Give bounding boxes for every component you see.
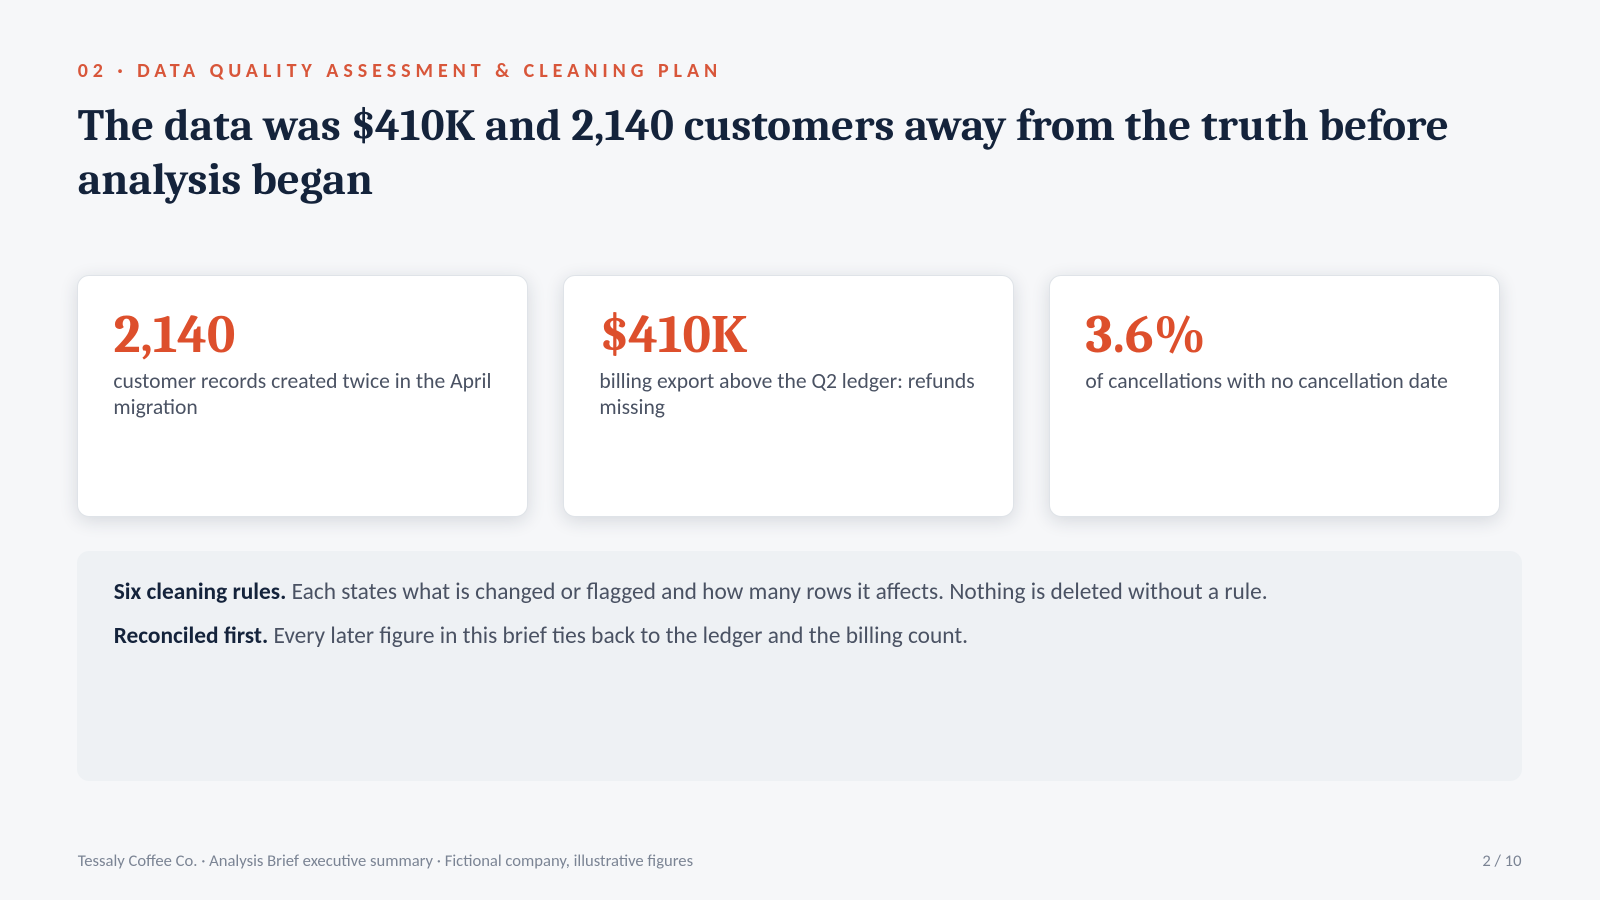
panel: stat card billing gap — [563, 275, 1014, 516]
stat description — [599, 367, 975, 420]
panel: stat card duplicate records — [77, 275, 528, 516]
title — [78, 101, 1449, 206]
footer source: Tessaly Coffee Co. · Analysis Brief executive summary · Fictional company, illustrative figures — [78, 851, 693, 871]
stat value: 2,140 — [114, 305, 235, 366]
title: The data was $410K and 2,140 customers away from the truth before — [78, 101, 1449, 152]
stat description — [113, 367, 491, 420]
eyebrow: 02 · DATA QUALITY ASSESSMENT & CLEANING PLAN — [78, 59, 722, 83]
stat description: migration — [113, 392, 198, 420]
stat description: customer records created twice in the April — [113, 367, 491, 394]
stat description: billing export above the Q2 ledger: refunds — [599, 367, 975, 394]
stat value: $410K — [600, 305, 747, 366]
stat value: 3.6% — [1086, 305, 1206, 366]
panel: cleaning notes — [77, 551, 1522, 781]
stat description: missing — [599, 392, 665, 420]
note: six cleaning rules: Six cleaning rules. Each states what is changed or flagged and how many rows it affects. Nothing is deleted without a rule. — [114, 578, 1268, 606]
panel: stat card missing dates — [1049, 275, 1500, 516]
page number: 2 / 10 — [1482, 851, 1522, 871]
stat description: of cancellations with no cancellation date — [1085, 367, 1448, 394]
note: reconciled first: Reconciled first. Every later figure in this brief ties back to the ledger and the billing count. — [114, 622, 968, 650]
title: analysis began — [78, 155, 373, 206]
